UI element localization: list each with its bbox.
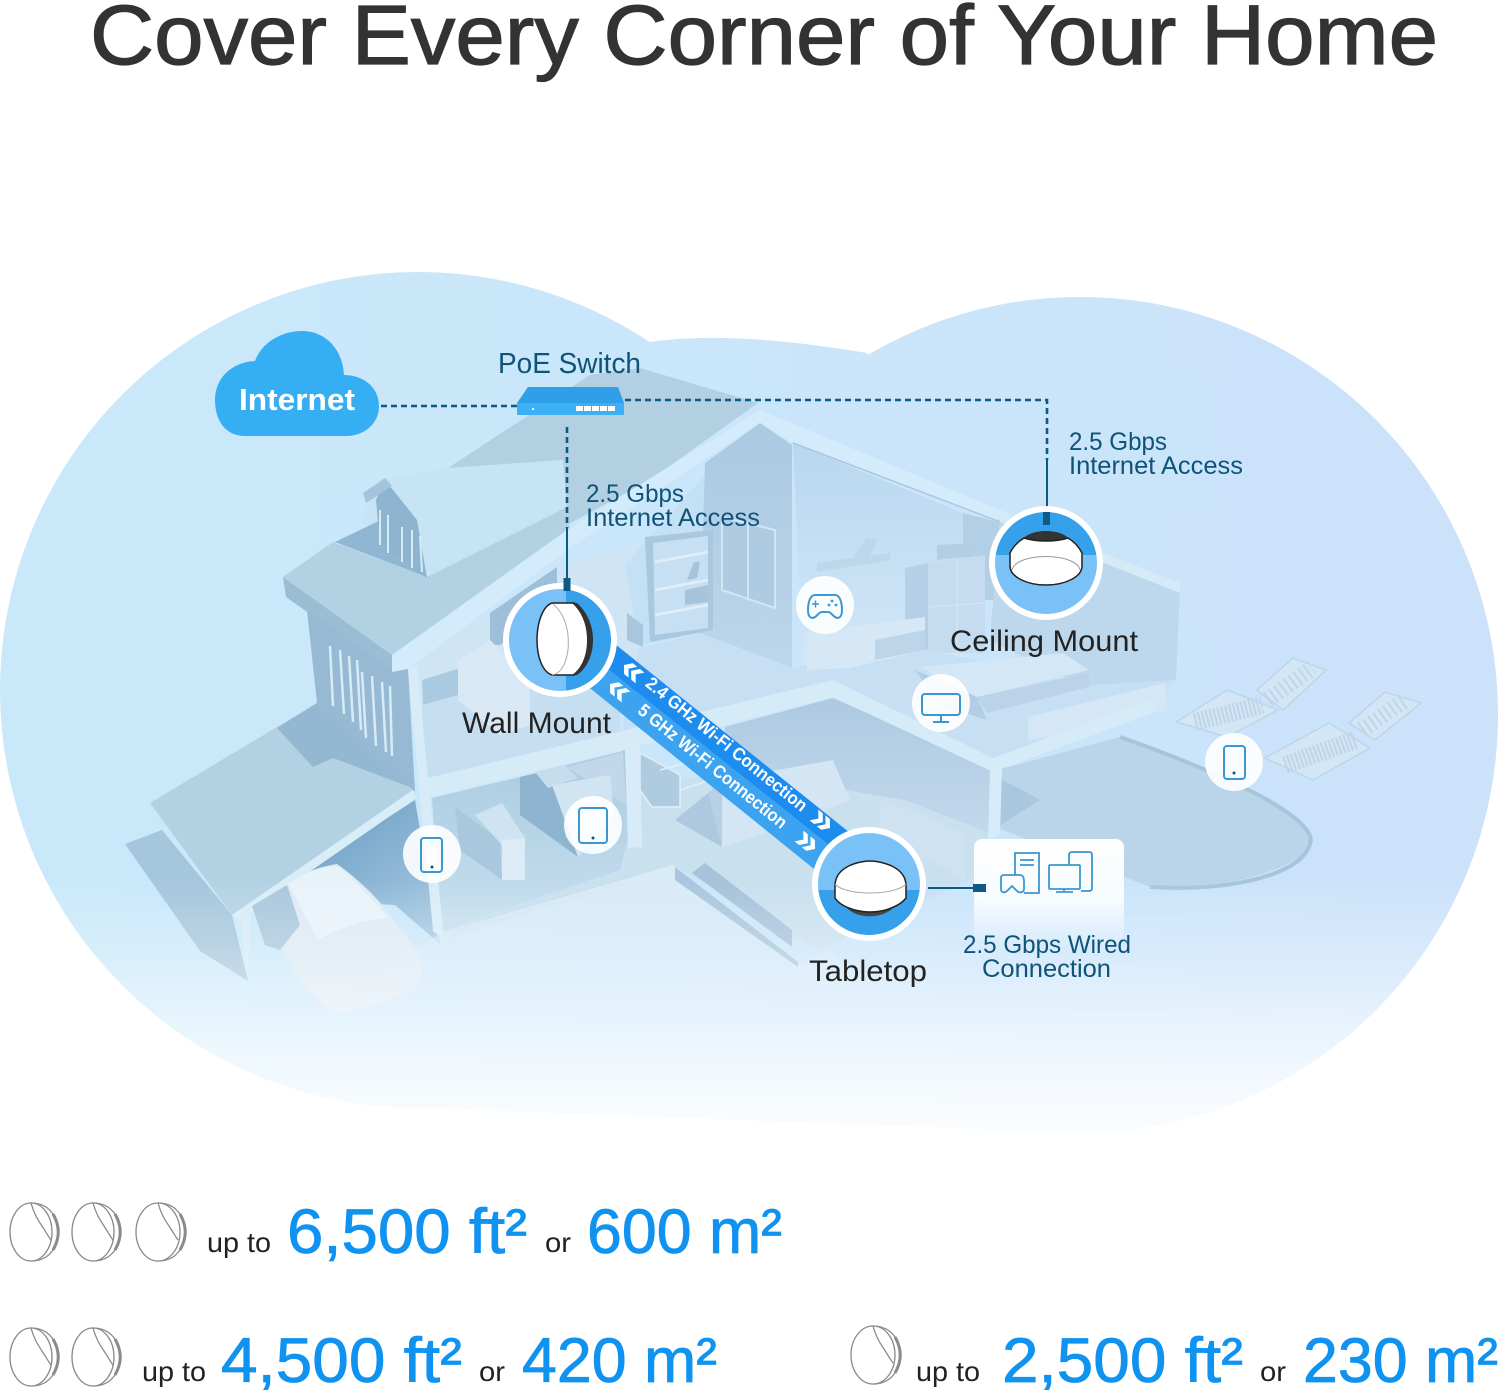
coverage row: three units: 6,500 ft² bbox=[287, 1197, 527, 1267]
upstairs left room bbox=[418, 545, 640, 785]
coverage row: one unit: or bbox=[1260, 1356, 1286, 1387]
wired devices panel bbox=[974, 839, 1124, 949]
ground floor wall bbox=[432, 750, 640, 940]
illustration: house coverage backdrop bbox=[0, 272, 1498, 1133]
roof trim bbox=[392, 410, 1012, 672]
2.4 GHz stripe bbox=[580, 632, 870, 862]
steps bbox=[675, 863, 798, 967]
upper roof slope bbox=[564, 470, 567, 507]
right wall bbox=[990, 515, 1180, 690]
internet access label line 2: ceiling: Internet Access bbox=[1069, 452, 1243, 480]
wired devices icons bbox=[1001, 852, 1092, 893]
unit label: Wall Mount: Wall Mount bbox=[462, 707, 612, 740]
coverage blob bbox=[0, 272, 1498, 1133]
upstairs back wall bbox=[625, 548, 640, 622]
roof fascia bbox=[283, 577, 392, 672]
cabinet block bbox=[675, 760, 850, 847]
coverage text: up to bbox=[916, 1356, 980, 1387]
patio shadow bbox=[1000, 780, 1040, 824]
coverage row: three units: or bbox=[545, 1227, 571, 1258]
floor slab strip bbox=[428, 680, 1155, 797]
coverage row: three units bbox=[10, 1197, 782, 1267]
wall window bbox=[722, 517, 775, 608]
unit icons bbox=[10, 1203, 185, 1261]
cloud: Internet: Internet bbox=[239, 382, 355, 417]
device icon: game controller bbox=[796, 576, 854, 634]
coverage text: up to bbox=[142, 1356, 206, 1387]
wifi band bbox=[570, 632, 870, 898]
internet access label: wall: 2.5 Gbps bbox=[586, 480, 684, 508]
band arrows bbox=[606, 660, 834, 854]
back roof bbox=[448, 368, 758, 525]
wall cable solid bbox=[566, 528, 568, 582]
device icon: tablet bbox=[564, 796, 622, 854]
tabletop unit bbox=[812, 827, 986, 941]
coverage row: two units: or bbox=[479, 1356, 505, 1387]
coverage row: three units: 600 m² bbox=[587, 1197, 782, 1267]
bed bbox=[915, 653, 1089, 720]
coverage row: two units bbox=[10, 1326, 717, 1390]
kitchen bbox=[520, 765, 614, 857]
unit icons bbox=[10, 1328, 120, 1386]
wired label line 1: 2.5 Gbps Wired bbox=[963, 931, 1131, 959]
device icon: monitor bbox=[912, 674, 970, 732]
lower roof slope bbox=[283, 507, 570, 655]
garage roof bbox=[150, 703, 413, 915]
device icon: pool phone bbox=[1205, 733, 1263, 791]
chair by wall unit bbox=[627, 613, 643, 647]
switch to ceiling unit cable bbox=[625, 400, 1047, 460]
wall mount unit bbox=[500, 578, 626, 697]
bookcase bbox=[645, 530, 713, 642]
dining set bbox=[640, 753, 710, 807]
desk bbox=[807, 617, 925, 670]
PoE switch bbox=[517, 387, 624, 415]
ground floor plane bbox=[537, 776, 994, 940]
house pillars bbox=[408, 665, 444, 940]
PoE switch label: PoE Switch bbox=[498, 348, 641, 380]
pool bbox=[995, 737, 1313, 889]
cloud: Internet bbox=[215, 331, 379, 436]
internet to switch cable bbox=[381, 405, 517, 407]
garage interior bbox=[311, 800, 440, 943]
garage pillar bbox=[241, 914, 250, 967]
cables bbox=[381, 400, 1047, 888]
wired label line 2: Connection bbox=[982, 955, 1111, 983]
internet access label line 2: wall: Internet Access bbox=[586, 504, 760, 532]
lower center room wall bbox=[725, 698, 993, 837]
wardrobe bbox=[905, 543, 985, 653]
device icon: garage phone bbox=[403, 825, 461, 883]
ceiling cable solid bbox=[1046, 460, 1048, 512]
unit icon bbox=[851, 1326, 900, 1384]
house cutaway bbox=[125, 368, 1421, 1020]
internet access label: ceiling: 2.5 Gbps bbox=[1069, 428, 1167, 456]
ceiling mount unit bbox=[989, 505, 1103, 620]
upper floor plane bbox=[636, 650, 1168, 690]
band label 2.4 GHz: 2.4 GHz Wi-Fi Connection bbox=[642, 673, 811, 816]
dormer bbox=[335, 478, 427, 578]
counter bbox=[455, 803, 525, 880]
unit label: Tabletop: Tabletop bbox=[809, 955, 927, 988]
coverage text: up to bbox=[207, 1227, 271, 1258]
pale foreground plane bbox=[433, 865, 744, 944]
lounge chairs bbox=[1176, 658, 1421, 780]
upper wall bbox=[307, 610, 415, 792]
garage side shadow bbox=[125, 830, 248, 981]
coverage row: one unit bbox=[851, 1326, 1498, 1390]
car bbox=[252, 864, 422, 1013]
bench bbox=[1028, 683, 1165, 740]
shelf and books bbox=[817, 537, 890, 572]
switch to wall unit cable bbox=[566, 427, 568, 528]
gable wall light bbox=[793, 444, 963, 530]
5 GHz stripe bbox=[570, 647, 850, 898]
unit label: Ceiling Mount: Ceiling Mount bbox=[950, 625, 1139, 658]
tabletop cable bbox=[928, 887, 975, 889]
band label 5 GHz: 5 GHz Wi-Fi Connection bbox=[634, 700, 791, 833]
gable wall dark bbox=[700, 423, 792, 668]
